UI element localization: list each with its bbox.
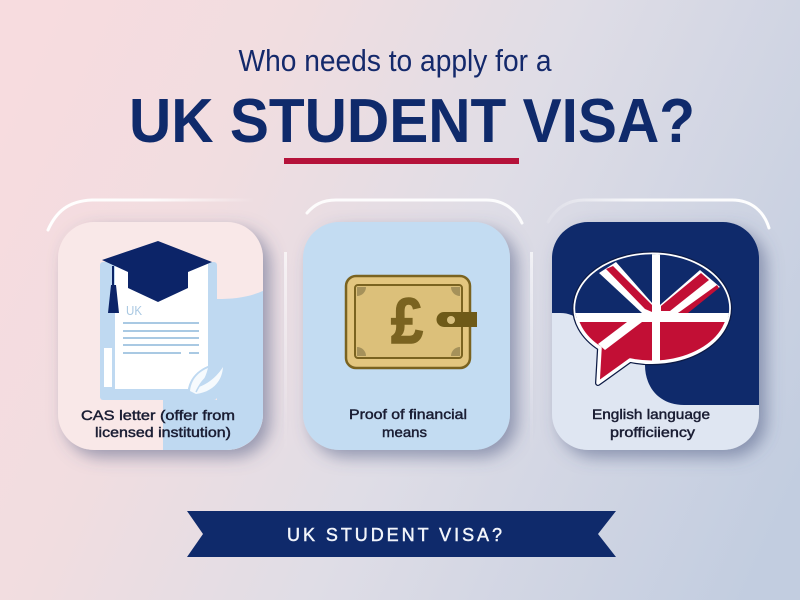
panel: English language: [552, 222, 759, 450]
card label: profficiiency: [610, 424, 695, 440]
decorative arc: card 1: [48, 200, 255, 230]
pound sign: £: [391, 285, 423, 357]
card background: [303, 222, 510, 450]
card label: licensed institution): [95, 424, 231, 440]
title: intro line: Who needs to apply for a: [238, 43, 552, 78]
card background: [552, 222, 759, 450]
card background: [58, 222, 263, 450]
red underline: [284, 158, 519, 164]
card blue corner: [163, 290, 265, 450]
decorative arc: card 2: [307, 200, 522, 223]
title: main heading: UK STUDENT VISA?: [129, 87, 695, 156]
banner text: UK STUDENT VISA?: [287, 525, 502, 545]
card label: CAS letter (offer from: [81, 407, 235, 423]
certificate text lines: [123, 322, 199, 354]
icon: graduation cap: [102, 241, 212, 313]
wallet clasp: [437, 312, 477, 327]
icon: wallet: [346, 276, 477, 368]
card label: means: [382, 424, 427, 440]
decorative arc: card 3: [548, 200, 769, 228]
panel: CAS letter: [58, 222, 265, 450]
card label: [81, 407, 235, 440]
panel: financial means: [303, 222, 510, 450]
icon: speech bubble with flag: [570, 250, 735, 383]
certificate UK label: UK: [126, 303, 142, 318]
banner ribbon: [187, 511, 616, 557]
card label: [592, 406, 710, 440]
separator: right: [530, 252, 533, 452]
icon: certificate document: [100, 262, 224, 400]
card label: [349, 406, 467, 440]
card label: Proof of financial: [349, 406, 467, 422]
separator: left: [284, 252, 287, 452]
card label: English language: [592, 406, 710, 422]
card navy shape: [552, 222, 759, 405]
